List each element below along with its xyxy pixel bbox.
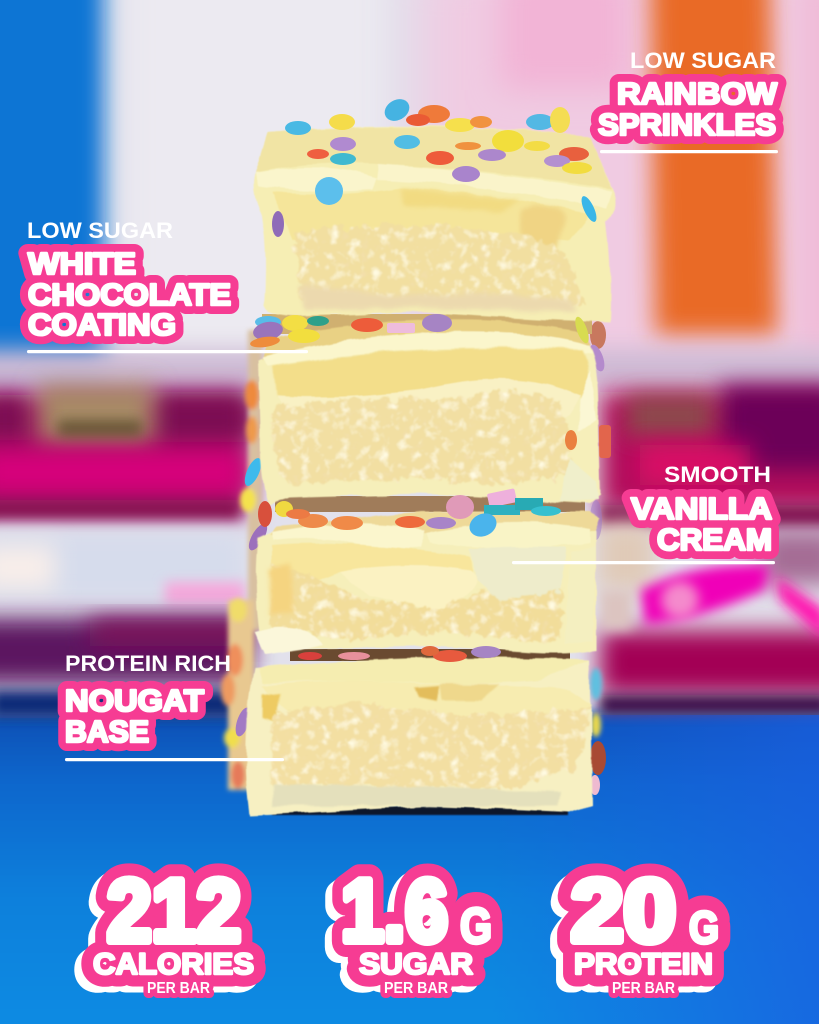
pink outline: PER BAR [612, 980, 675, 997]
heading: VANILLA [631, 491, 772, 526]
heading: SPRINKLES [598, 107, 776, 142]
pointer line [65, 758, 284, 761]
sharp side sprinkles [233, 321, 611, 795]
white offset outline: 1.6 [334, 867, 441, 966]
kicker: PROTEIN RICH [65, 651, 231, 676]
value and label: PER BAR [384, 980, 448, 997]
heading [631, 491, 772, 557]
white offset outline: 212 [100, 867, 234, 966]
heading: RAINBOW [617, 76, 778, 111]
heading: CHOCOLATE [28, 277, 231, 312]
stat: 1.6g sugar [334, 861, 492, 997]
pink outline [571, 861, 719, 997]
floor shadow [272, 806, 568, 815]
nougat [270, 705, 588, 790]
pink outline: CALORIES [93, 948, 254, 981]
right wrappers [600, 392, 819, 512]
frosty right side [470, 547, 566, 604]
bar 1 [254, 126, 615, 322]
top surface [256, 127, 612, 188]
top lip [258, 657, 590, 684]
frosting ridge [256, 167, 376, 191]
heading: COATING [28, 307, 176, 342]
value and label: PER BAR [612, 980, 675, 997]
heading: WHITE [28, 246, 136, 281]
heading: VANILLA [631, 491, 772, 526]
pink outline: PER BAR [147, 980, 210, 997]
pointer line [600, 150, 778, 153]
melted coat [272, 188, 590, 240]
pink outline: 212 [107, 861, 241, 960]
heading: COATING [28, 307, 176, 342]
heading: NOUGAT [65, 683, 204, 718]
value and label [93, 861, 254, 997]
pink outline: SUGAR [359, 948, 473, 981]
kicker: SMOOTH [664, 462, 771, 487]
callout: white chocolate coating [27, 218, 308, 353]
pointer line [27, 350, 308, 353]
value and label: PROTEIN [574, 948, 713, 981]
stack of protein bars [221, 95, 615, 816]
stat: 212 calories [86, 861, 254, 997]
shell [246, 658, 592, 816]
value and label: G [460, 898, 492, 954]
right lip [427, 522, 590, 549]
yellow cream [272, 543, 472, 602]
value and label: 212 [107, 861, 241, 960]
callout: nougat base [65, 651, 284, 761]
yellow cream [272, 348, 589, 402]
value and label [341, 861, 492, 997]
heading: CREAM [657, 522, 772, 557]
heading: BASE [65, 714, 149, 749]
heading: NOUGAT [65, 683, 204, 718]
shell [258, 335, 600, 505]
dark gaps between the bars [262, 314, 592, 815]
bar 3 [255, 512, 600, 655]
kicker: LOW SUGAR [27, 218, 173, 243]
bar 4 [246, 657, 592, 816]
value and label: SUGAR [359, 948, 473, 981]
blurred rear sprinkles on the sides [221, 330, 602, 790]
white coating lump [255, 627, 322, 655]
bar 2 [258, 320, 600, 505]
value and label: 20 [571, 861, 676, 960]
top tan surface [262, 320, 590, 360]
pink outline: 20 [571, 861, 676, 960]
white offset outline: PROTEIN [567, 954, 706, 987]
heading: BASE [65, 714, 149, 749]
value and label: G [689, 902, 719, 953]
left wrappers [0, 395, 250, 515]
lip [262, 332, 592, 366]
heading: SPRINKLES [598, 107, 776, 142]
coating shell [254, 126, 615, 322]
stat: 20g protein [564, 861, 719, 997]
pink outline: G [460, 898, 492, 954]
left lip [272, 524, 425, 549]
pink outline: 1.6 [341, 861, 448, 960]
pink outline: PER BAR [384, 980, 448, 997]
nougat [292, 226, 582, 304]
heading: RAINBOW [617, 76, 778, 111]
white offset outline: 20 [564, 867, 669, 966]
cream [262, 680, 592, 725]
shell [256, 520, 596, 653]
white offset outline: CALORIES [86, 954, 247, 987]
value and label: CALORIES [93, 948, 254, 981]
nougat [272, 391, 572, 486]
heading: WHITE [28, 246, 136, 281]
heading [28, 246, 231, 342]
pink outline: PROTEIN [574, 948, 713, 981]
heading [598, 76, 778, 142]
heading: CHOCOLATE [28, 277, 231, 312]
white offset outline: SUGAR [352, 954, 466, 987]
white offset outline [564, 867, 706, 987]
bottom lip [272, 785, 560, 806]
pointer line [512, 561, 775, 564]
callout: vanilla cream [512, 462, 775, 564]
sprinkles [249, 95, 599, 662]
heading [65, 683, 204, 749]
kicker: LOW SUGAR [630, 48, 776, 73]
heading: CREAM [657, 522, 772, 557]
pink outline [341, 861, 492, 997]
callout: rainbow sprinkles [598, 48, 778, 153]
value and label: 1.6 [341, 861, 448, 960]
top surface [270, 512, 600, 535]
value and label: PER BAR [147, 980, 210, 997]
value and label [571, 861, 719, 997]
nougat [270, 565, 562, 644]
pink outline: G [689, 902, 719, 953]
pink outline [93, 861, 254, 997]
